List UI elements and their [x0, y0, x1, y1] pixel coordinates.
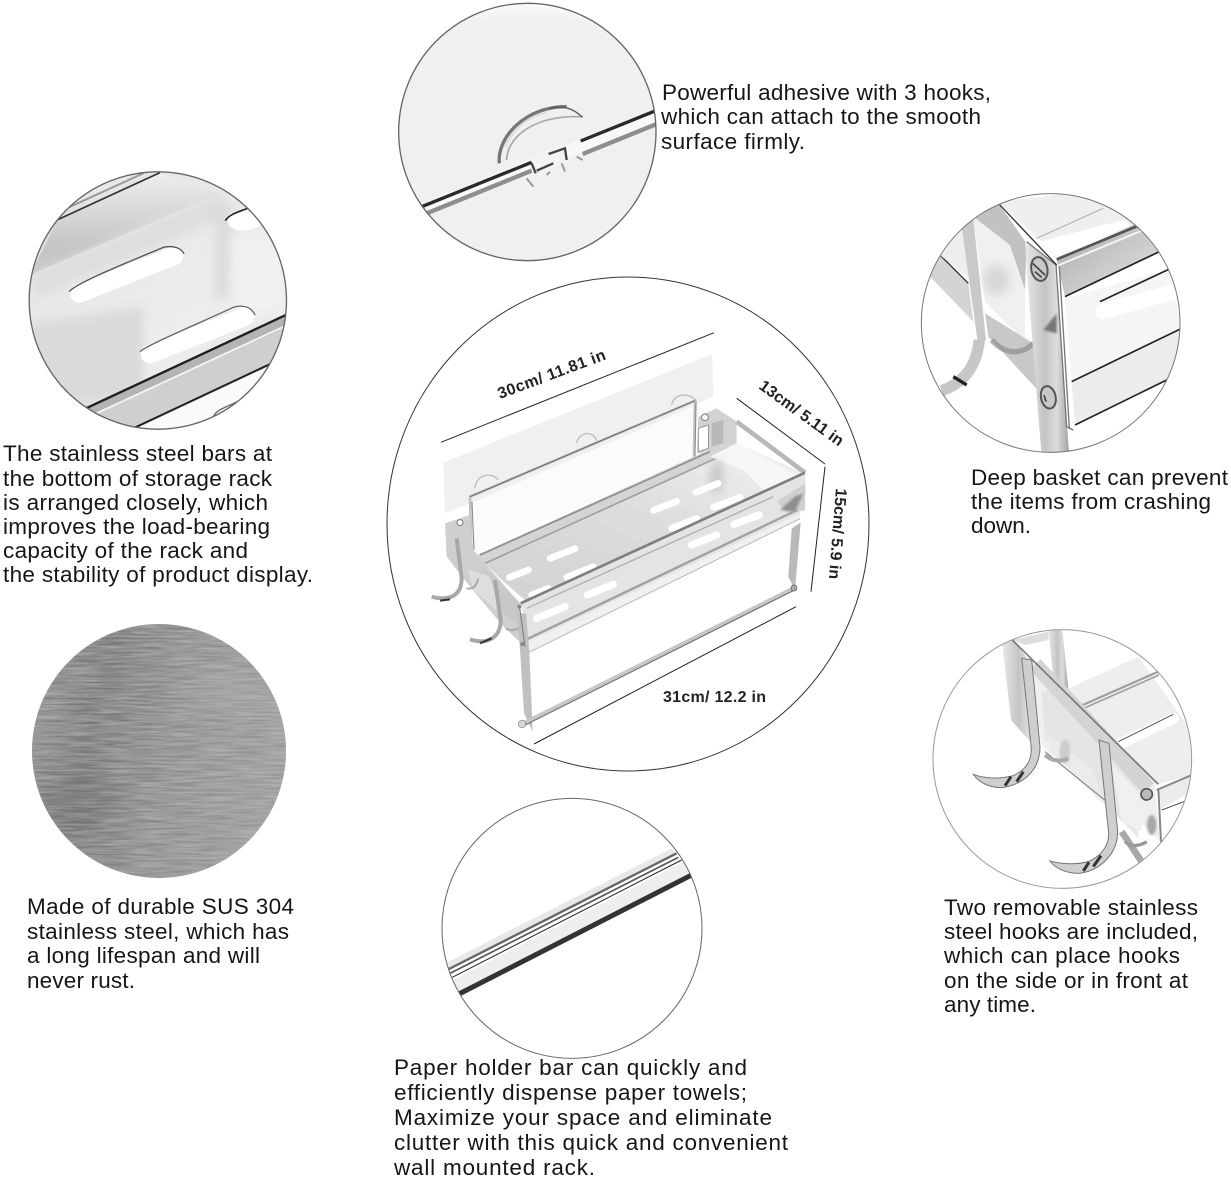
dimension label: width 30cm: 30cm/ 11.81 in — [495, 347, 608, 403]
left leg — [518, 613, 533, 732]
text: steel bars description: the stability of product display. — [3, 562, 313, 587]
floor of basket — [1065, 657, 1192, 785]
adhesive suction arc — [499, 107, 583, 163]
adhesive back plate — [443, 354, 713, 550]
hook curve — [942, 340, 979, 391]
corner hole — [227, 208, 262, 231]
lower rail band — [95, 327, 287, 430]
dimension lines — [441, 333, 825, 744]
rear top corner bracket — [697, 408, 737, 453]
towel bar — [523, 588, 794, 724]
text: SUS 304 description: never rust. — [27, 968, 135, 993]
text: removable hooks description: Two removable stainless — [944, 895, 1198, 920]
screw and right end — [1141, 789, 1152, 800]
panel: deep basket detail circle — [910, 190, 1190, 457]
slot 1 — [79, 256, 174, 293]
text: SUS 304 description: Made of durable SUS 304 — [27, 894, 294, 919]
text: steel bars description: The stainless steel bars at — [3, 441, 273, 466]
text: removable hooks description: any time. — [944, 992, 1036, 1017]
text: paper holder description: Paper holder bar can quickly and — [394, 1055, 747, 1080]
text: deep basket description — [971, 465, 1229, 538]
panel: brushed stainless steel swatch circle — [30, 622, 290, 880]
panel: adhesive hook detail circle — [390, 0, 660, 267]
text: steel bars description — [3, 441, 313, 587]
right leg — [788, 523, 801, 590]
rear bracket — [1002, 640, 1030, 741]
basket floor slots — [509, 483, 740, 595]
text: steel bars description: the bottom of storage rack — [3, 466, 273, 491]
text: SUS 304 description — [27, 894, 294, 993]
text: steel bars description: is arranged closely, which — [3, 490, 268, 515]
front face — [520, 473, 806, 653]
upper rail — [43, 170, 157, 217]
hook 1 — [973, 658, 1040, 788]
text: removable hooks description — [943, 895, 1198, 1017]
suction cups — [475, 395, 697, 488]
text: steel bars description: capacity of the rack and — [3, 538, 248, 563]
rail — [422, 110, 657, 213]
left bracket and side plate — [445, 515, 523, 645]
text: adhesive hooks description: which can attach to the smooth — [660, 104, 981, 129]
text: adhesive hooks description: Powerful adhesive with 3 hooks, — [662, 80, 991, 105]
text: steel bars description: improves the load-bearing — [3, 514, 270, 539]
front slanted plate — [1028, 657, 1160, 842]
text: paper holder description: Maximize your space and eliminate — [394, 1105, 772, 1130]
dimension label: depth 13cm: 13cm/ 5.11 in — [756, 377, 847, 450]
basket inner floor — [485, 443, 805, 602]
slot 2 — [150, 317, 245, 354]
text: adhesive hooks description: surface firmly. — [661, 129, 805, 154]
hooks — [432, 538, 522, 643]
dimension label: bar 31cm: 31cm/ 12.2 in — [663, 689, 766, 706]
text: paper holder description: efficiently dispense paper towels; — [394, 1080, 747, 1105]
text: adhesive hooks description — [660, 80, 991, 154]
panel: paper holder bar detail circle — [435, 797, 705, 1063]
rack illustration — [432, 354, 806, 732]
vertical bracket — [1025, 242, 1069, 457]
text: paper holder description: wall mounted rack. — [393, 1155, 595, 1180]
text: paper holder description: clutter with this quick and convenient — [394, 1130, 789, 1155]
front face slots — [537, 515, 759, 618]
text: deep basket description: the items from crashing — [971, 489, 1211, 514]
dimension label: height 15cm: 15cm/ 5.9 in — [825, 488, 849, 580]
text: removable hooks description: steel hooks are included, — [944, 919, 1198, 944]
screws — [1029, 256, 1058, 410]
text: deep basket description: Deep basket can prevent — [971, 465, 1229, 490]
text: SUS 304 description: a long lifespan and will — [27, 943, 260, 968]
panel: central product dimensions circle — [387, 277, 869, 771]
hook 2 — [1050, 740, 1118, 873]
left plate and pole — [930, 255, 973, 322]
panel: perforated basket floor detail circle — [28, 171, 288, 430]
text: removable hooks description: on the side or in front at — [944, 968, 1189, 993]
text: paper holder description — [393, 1055, 789, 1180]
text: deep basket description: down. — [971, 513, 1031, 538]
top rail — [470, 401, 696, 550]
centre post — [1048, 630, 1068, 688]
text: SUS 304 description: stainless steel, which has — [27, 919, 289, 944]
panel: removable hooks detail circle — [925, 625, 1195, 892]
text: removable hooks description: which can place hooks — [943, 943, 1180, 968]
